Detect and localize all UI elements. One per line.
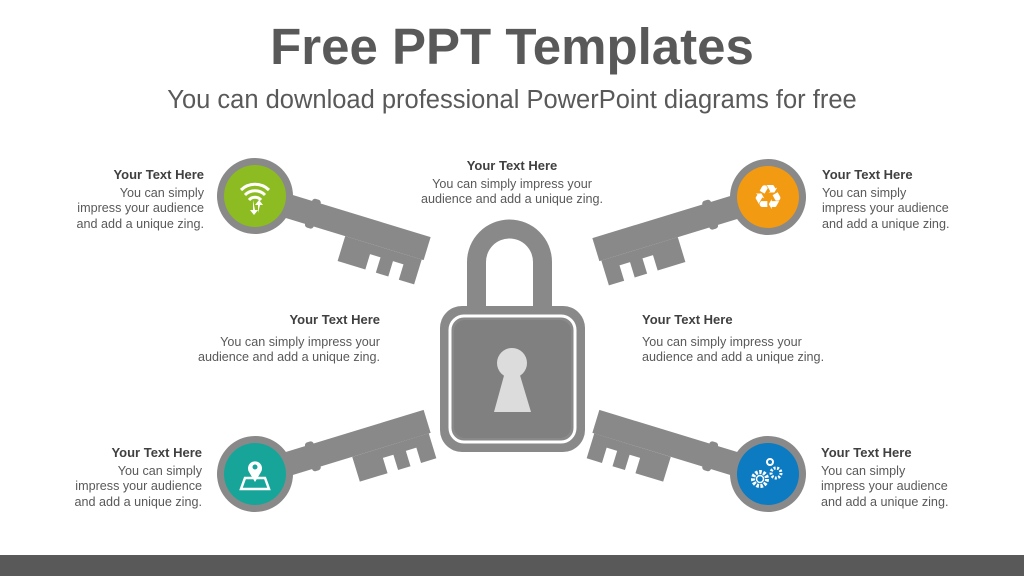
text: top-left: and add a unique zing.	[77, 216, 204, 230]
text: top-left	[77, 167, 204, 230]
text: bottom-right	[821, 445, 948, 508]
text: middle-left: You can simply impress your	[220, 334, 380, 348]
icon: recycle orange: ♻	[753, 178, 783, 218]
text: top-right	[822, 167, 949, 230]
text: middle-right	[642, 312, 824, 364]
text: bottom-right: Your Text Here	[821, 445, 912, 460]
icon: gears blue	[737, 443, 799, 505]
key: top-left	[208, 149, 438, 285]
text: bottom-left: and add a unique zing.	[75, 494, 202, 508]
title: Free PPT Templates	[270, 18, 754, 75]
text: bottom-right: You can simply	[821, 464, 905, 478]
text: top-right: Your Text Here	[822, 167, 913, 182]
key: top-right	[585, 150, 815, 286]
text: middle-right: audience and add a unique zing.	[642, 350, 824, 364]
text: bottom-left	[75, 445, 202, 508]
text: middle-right: You can simply impress your	[642, 334, 802, 348]
text: top-center: You can simply impress your	[432, 176, 592, 190]
icon: wifi green	[224, 165, 286, 227]
text: bottom-left: You can simply	[118, 464, 202, 478]
text: top-center: Your Text Here	[467, 158, 557, 173]
text: bottom-left: impress your audience	[75, 479, 202, 493]
footer bar	[0, 555, 1024, 576]
text: top-center	[421, 158, 603, 206]
text: top-left: Your Text Here	[113, 167, 204, 182]
text: top-right: and add a unique zing.	[822, 216, 949, 230]
text: middle-left: Your Text Here	[289, 312, 380, 327]
text: top-right: impress your audience	[822, 201, 949, 215]
text: bottom-left: Your Text Here	[111, 445, 202, 460]
text: middle-left	[198, 312, 380, 364]
text: middle-left: audience and add a unique zing.	[198, 350, 380, 364]
text: middle-right: Your Text Here	[642, 312, 733, 327]
icon: map teal	[224, 443, 286, 505]
text: top-center: audience and add a unique zing.	[421, 192, 603, 206]
subtitle: You can download professional PowerPoint diagrams for free	[167, 86, 857, 114]
key: bottom-right	[585, 385, 815, 521]
text: top-right: You can simply	[822, 186, 906, 200]
icon: recycle orange	[737, 166, 799, 228]
text: bottom-right: impress your audience	[821, 479, 948, 493]
text: top-left: You can simply	[120, 186, 204, 200]
padlock	[440, 220, 585, 452]
text: bottom-right: and add a unique zing.	[821, 494, 948, 508]
key: bottom-left	[208, 385, 438, 521]
text: top-left: impress your audience	[77, 201, 204, 215]
